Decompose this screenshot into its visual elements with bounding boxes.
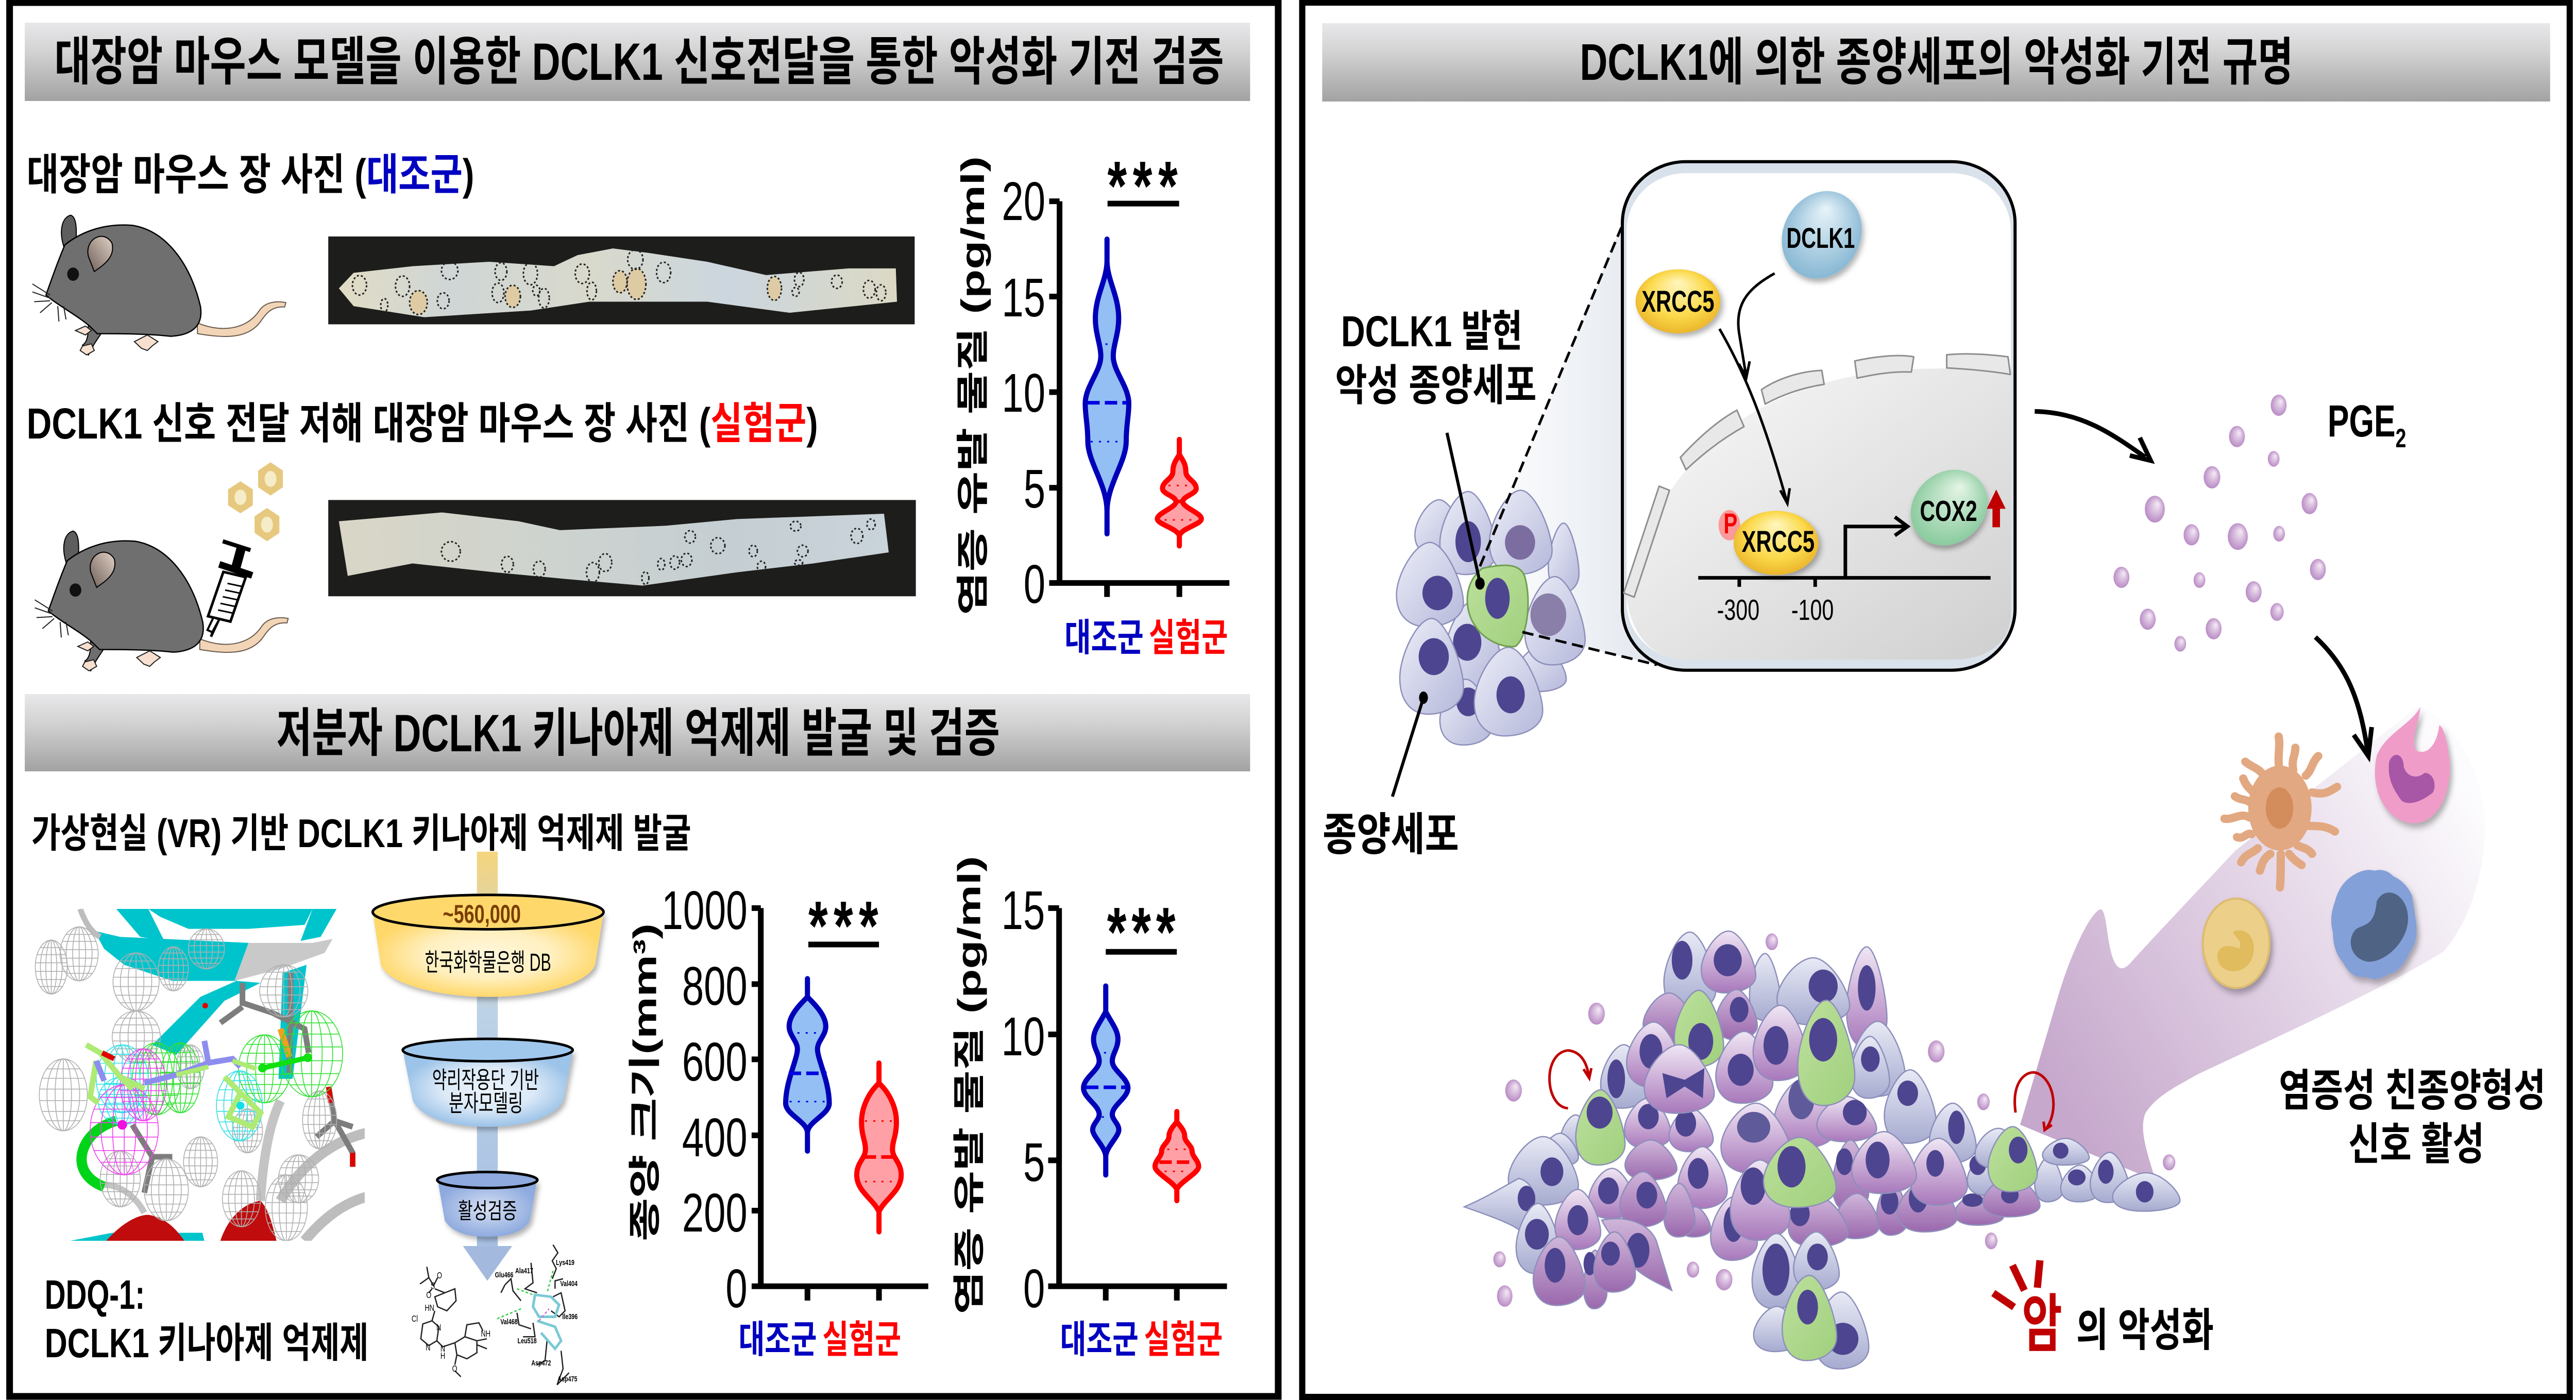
diagram: virtual screening funnel: ~560,000: [443, 900, 521, 929]
violin chart: inflammatory substance with inhibitor: 10: [1002, 1005, 1045, 1067]
text: inflammatory pro-tumour signal activation: 염증성 친종양형성: [2279, 1066, 2546, 1115]
text: cancer malignancy: [1993, 1260, 2214, 1359]
icons: immune cells: [2203, 707, 2450, 988]
text: VR-based discovery caption: 가상현실 (VR) 기반 DCLK1 키나아제 억제제 발굴: [31, 812, 691, 856]
violin chart: inflammatory substance with inhibitor: 염증 유발 물질 (pg/ml): [952, 856, 987, 1314]
violin chart: inflammatory substance in mouse model: 10: [1002, 362, 1045, 424]
label: DCLK1-expressing malignant tumour cell: 악성 종양세포: [1335, 362, 1536, 410]
diagram: DDQ-1 chemical structure and binding residues: O: [452, 1364, 457, 1374]
violin chart: tumour size: 1000: [662, 879, 748, 941]
text: control group caption: 대장암 마우스 장 사진 ( 대조군): [27, 151, 474, 199]
diagram: virtual screening funnel: 분자모델링: [449, 1091, 523, 1117]
diagram: DDQ-1 chemical structure and binding residues: Asp475: [557, 1374, 577, 1383]
arrow: to PGE2: [2035, 411, 2150, 461]
violin chart: tumour size: 800: [682, 955, 748, 1017]
diagram: DDQ-1 chemical structure and binding residues: Asp472: [531, 1358, 551, 1367]
violin chart: inflammatory substance in mouse model: 15: [1002, 266, 1045, 328]
violin chart: inflammatory substance with inhibitor: 0: [1023, 1257, 1045, 1319]
arrows: red proliferation arrows: [1550, 1051, 2054, 1130]
text: cancer malignancy: 암: [2022, 1290, 2062, 1359]
label: tumour cell: 종양세포: [1323, 810, 1459, 861]
diagram: DDQ-1 chemical structure and binding residues: Lys419: [556, 1258, 574, 1267]
label: PGE2: 2: [2396, 423, 2406, 453]
text: treated group caption: DCLK1 신호 전달 저해 대장암 마우스 장 사진 ( 실험군): [27, 400, 818, 448]
diagram: DDQ-1 chemical structure and binding residues: NH: [481, 1329, 490, 1339]
diagram: DDQ-1 chemical structure and binding residues: H: [440, 1351, 445, 1361]
inset: molecular mechanism in nucleus: XRCC5: [1742, 525, 1815, 559]
diagram: DDQ-1 chemical structure and binding residues: Val468: [500, 1317, 518, 1326]
label: DCLK1-expressing malignant tumour cell: [1335, 308, 1536, 589]
photo: control colon: [328, 237, 914, 324]
diagram: virtual screening funnel: 약리작용단 기반: [432, 1068, 539, 1093]
icon: granulocyte: [2203, 899, 2269, 988]
violin chart: tumour size: 0: [725, 1257, 748, 1319]
violin chart: inflammatory substance with inhibitor: 대조군: [1060, 1318, 1139, 1361]
text: DDQ-1 name: DCLK1 키나아제 억제제: [45, 1320, 368, 1366]
diagram: virtual screening funnel: 활성검증: [458, 1199, 517, 1223]
diagram: DDQ-1 chemical structure and binding residues: O: [426, 1290, 431, 1301]
diagram: DDQ-1 chemical structure and binding residues: [412, 1245, 578, 1385]
violin chart: inflammatory substance in mouse model: 대조군: [1064, 616, 1144, 659]
panel: left, colon cancer mouse model and inhibitor: [10, 3, 1278, 1396]
diagram: DDQ-1 chemical structure and binding residues: HN: [425, 1303, 434, 1313]
icon: treated mouse with syringe: [35, 462, 288, 671]
text: cancer malignancy: 의 악성화: [2076, 1306, 2214, 1356]
heading bar: DCLK1 signalling validation: 대장암 마우스 모델을 이용한 DCLK1 신호전달을 통한 악성화 기전 검증: [54, 32, 1224, 91]
violin chart: tumour size: 600: [682, 1031, 748, 1092]
inset: molecular mechanism in nucleus: XRCC5: [1641, 284, 1715, 318]
photo: treated colon: [328, 500, 916, 596]
diagram: DDQ-1 chemical structure and binding residues: Leu518: [518, 1336, 537, 1345]
heading bar: mechanism: [1322, 23, 2550, 102]
violin chart: tumour size: [627, 879, 928, 1361]
inset: molecular mechanism in nucleus: [1622, 162, 2015, 670]
violin chart: inflammatory substance in mouse model: 5: [1024, 458, 1045, 519]
text: inflammatory pro-tumour signal activation: 신호 활성: [2348, 1119, 2484, 1169]
violin chart: inflammatory substance in mouse model: 0: [1024, 553, 1045, 615]
label: tumour cell: [1323, 691, 1459, 861]
violin chart: tumour size: 400: [682, 1106, 748, 1168]
diagram: virtual screening funnel: [372, 852, 603, 1281]
text: inflammatory pro-tumour signal activation: [2279, 1066, 2546, 1169]
heading bar: mechanism: DCLK1에 의한 종양세포의 악성화 기전 규명: [1580, 33, 2293, 91]
violin chart: tumour size: 200: [682, 1182, 748, 1243]
text: DDQ-1 name: DDQ-1:: [45, 1272, 145, 1318]
heading bar: small-molecule inhibitor discovery: [25, 694, 1250, 771]
inset: molecular mechanism in nucleus: -300: [1717, 593, 1759, 627]
diagram: DDQ-1 chemical structure and binding residues: Glu466: [495, 1270, 514, 1279]
violin chart: inflammatory substance with inhibitor: [952, 856, 1227, 1361]
heading bar: DCLK1 signalling validation: [25, 23, 1250, 101]
inset: molecular mechanism in nucleus: COX2: [1920, 494, 1977, 528]
violin chart: inflammatory substance in mouse model: ***: [1108, 147, 1178, 225]
icon: neutrophil: [2375, 707, 2450, 823]
violin chart: inflammatory substance with inhibitor: 15: [1002, 879, 1045, 941]
icon: dendritic cell: [2225, 736, 2337, 887]
illustration: tumour cell cluster: [1397, 491, 1585, 745]
violin chart: inflammatory substance in mouse model: [955, 147, 1229, 659]
inset: molecular mechanism in nucleus: P: [1724, 508, 1737, 540]
diagram: DDQ-1 chemical structure and binding residues: Cl: [412, 1314, 418, 1324]
icon: control mouse: [32, 215, 286, 355]
zoom cone from cell to inset: [1480, 223, 1657, 665]
label: DCLK1-expressing malignant tumour cell: DCLK1 발현: [1341, 308, 1522, 356]
violin chart: inflammatory substance with inhibitor: 5: [1023, 1131, 1045, 1193]
diagram: DDQ-1 chemical structure and binding residues: Val404: [560, 1279, 578, 1288]
text: DDQ-1 name: [45, 1272, 368, 1366]
particles: PGE2: [2113, 395, 2326, 652]
big arrow: pro-tumour signalling towards tumour: [2020, 706, 2485, 1180]
zoom guide dashed lines: [1480, 227, 1657, 665]
diagram: virtual screening funnel: 한국화학물은행 DB: [425, 948, 551, 976]
violin chart: inflammatory substance in mouse model: 염증 유발 물질 (pg/ml): [955, 156, 991, 615]
particles: PGE2 around tumour: [1494, 934, 2175, 1307]
label: PGE2: PGE: [2328, 396, 2396, 447]
inset: molecular mechanism in nucleus: DCLK1: [1786, 223, 1855, 255]
violin chart: tumour size: ***: [808, 887, 878, 965]
diagram: DDQ-1 chemical structure and binding residues: S: [431, 1281, 435, 1291]
diagram: DDQ-1 chemical structure and binding residues: N: [436, 1323, 441, 1333]
violin chart: tumour size: 대조군: [738, 1318, 817, 1361]
violin chart: tumour size: 종양 크기(mm³): [627, 923, 664, 1241]
heading bar: small-molecule inhibitor discovery: 저분자 DCLK1 키나아제 억제제 발굴 및 검증: [277, 704, 1000, 763]
image: pharmacophore docking model: [35, 909, 367, 1241]
violin chart: inflammatory substance with inhibitor: ***: [1107, 893, 1176, 971]
diagram: DDQ-1 chemical structure and binding residues: N: [440, 1344, 445, 1354]
inset: molecular mechanism in nucleus: -100: [1791, 593, 1834, 627]
illustration: tumour mass: [1464, 931, 2180, 1369]
violin chart: tumour size: 실험군: [822, 1318, 901, 1361]
violin chart: inflammatory substance with inhibitor: 실험군: [1144, 1318, 1223, 1361]
panel: right, malignancy mechanism: [1302, 3, 2570, 1397]
diagram: DDQ-1 chemical structure and binding residues: Ile396: [562, 1312, 578, 1321]
diagram: DDQ-1 chemical structure and binding residues: Ala417: [515, 1266, 533, 1275]
diagram: DDQ-1 chemical structure and binding residues: O: [437, 1271, 442, 1281]
diagram: DDQ-1 chemical structure and binding residues: N: [426, 1343, 430, 1353]
icon: macrophage: [2331, 870, 2417, 979]
arrow: to immune cells: [2315, 637, 2371, 756]
violin chart: inflammatory substance in mouse model: 20: [1002, 170, 1045, 232]
violin chart: inflammatory substance in mouse model: 실험군: [1149, 616, 1228, 659]
